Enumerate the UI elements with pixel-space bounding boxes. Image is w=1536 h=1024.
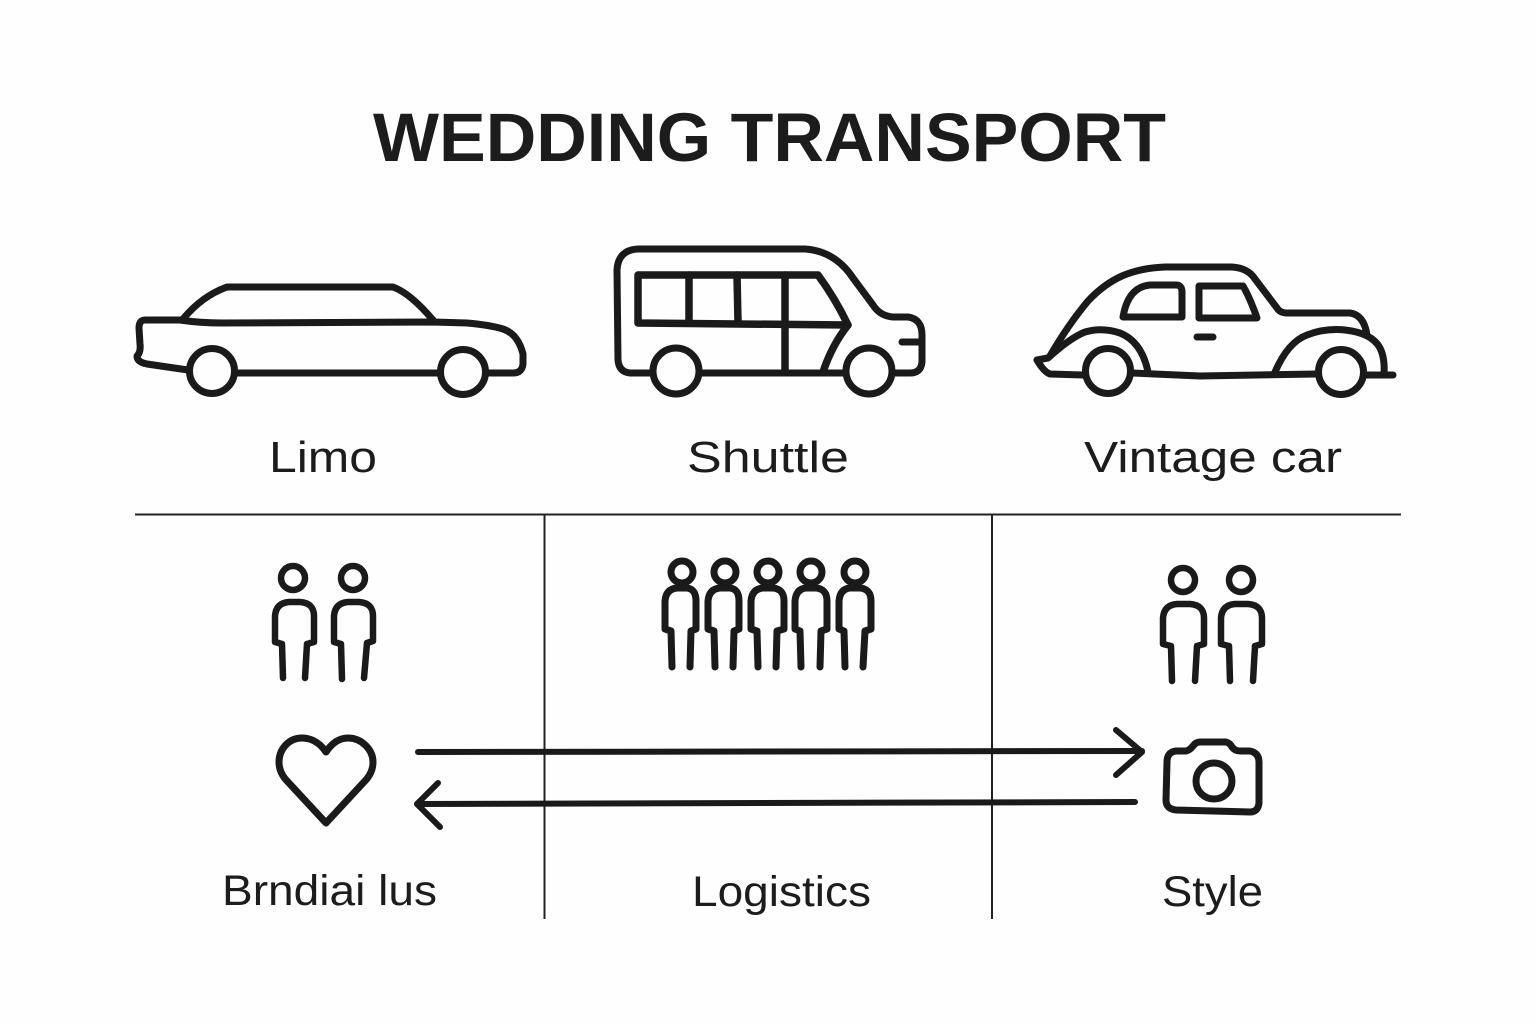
label: style: Style — [1162, 868, 1263, 916]
icon: shuttle — [617, 249, 922, 394]
label: shuttle: Shuttle — [687, 433, 849, 482]
title: WEDDING TRANSPORT — [373, 99, 1166, 176]
icon: two people, limo capacity — [275, 566, 373, 679]
icon: camera — [1166, 742, 1259, 812]
table dividers — [135, 514, 1401, 919]
label: logistics: Logistics — [692, 868, 871, 916]
arrow: left, towards heart — [417, 783, 1135, 827]
label: bridal plus: Brndiai lus — [222, 867, 437, 915]
icon: limo — [137, 287, 523, 394]
icon: vintage car — [1037, 267, 1393, 394]
icon: two people, vintage car capacity — [1163, 568, 1262, 681]
icon: heart — [279, 738, 373, 823]
arrow: right, towards camera — [418, 730, 1142, 775]
icon: five people, shuttle capacity — [665, 561, 871, 667]
label: limo: Limo — [269, 433, 377, 482]
label: vintage car: Vintage car — [1084, 433, 1342, 482]
